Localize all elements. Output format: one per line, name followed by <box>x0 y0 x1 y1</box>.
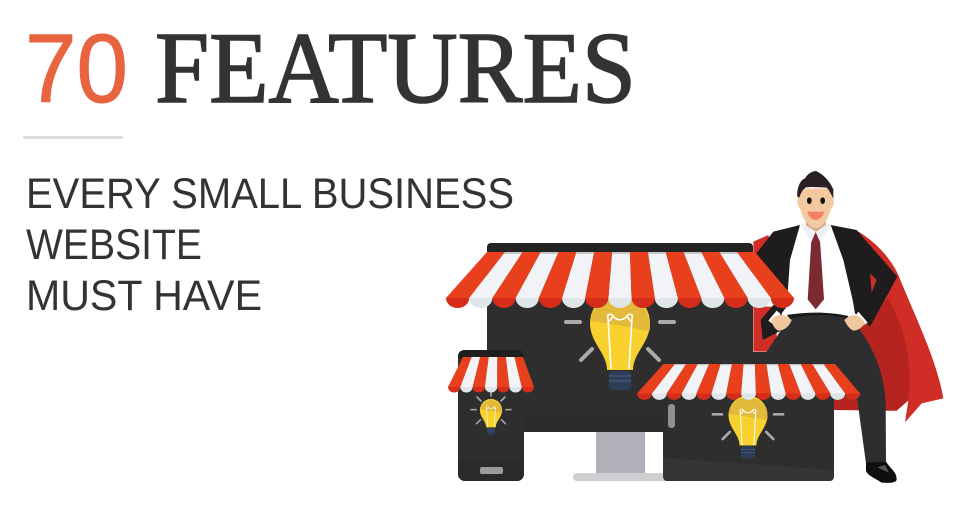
awning: phone <box>448 357 534 393</box>
tablet home button <box>668 404 675 428</box>
head <box>797 171 834 233</box>
awning: monitor <box>446 252 794 308</box>
hands <box>768 311 868 331</box>
shoe <box>866 462 897 483</box>
number 70: 70 <box>25 14 128 123</box>
shirt <box>787 225 853 315</box>
illustration: businessman superhero <box>753 171 943 483</box>
device: desktop monitor <box>487 243 753 481</box>
icon: phone light bulb <box>471 392 511 435</box>
shirt collar <box>801 224 831 242</box>
subtitle: EVERY SMALL BUSINESS <box>26 170 514 218</box>
red cape <box>753 231 943 422</box>
phone home button <box>480 467 503 474</box>
device: tablet <box>663 352 834 481</box>
icon: tablet light bulb <box>713 396 783 459</box>
device: phone <box>458 350 524 481</box>
monitor body <box>487 243 753 432</box>
subtitle <box>26 170 514 320</box>
awning: tablet <box>637 364 860 400</box>
divider rule <box>23 136 123 139</box>
tie <box>808 232 824 309</box>
monitor base <box>573 473 673 481</box>
waistband shadow <box>787 313 848 319</box>
title: 70 FEATURES <box>25 12 636 125</box>
subtitle: WEBSITE <box>26 221 202 269</box>
pocket square <box>870 273 877 293</box>
icon: monitor light bulb <box>566 293 674 390</box>
word FEATURES: FEATURES <box>155 12 636 125</box>
monitor stand <box>596 432 645 474</box>
trousers <box>767 314 886 463</box>
subtitle: MUST HAVE <box>26 272 262 320</box>
jacket <box>755 225 897 340</box>
